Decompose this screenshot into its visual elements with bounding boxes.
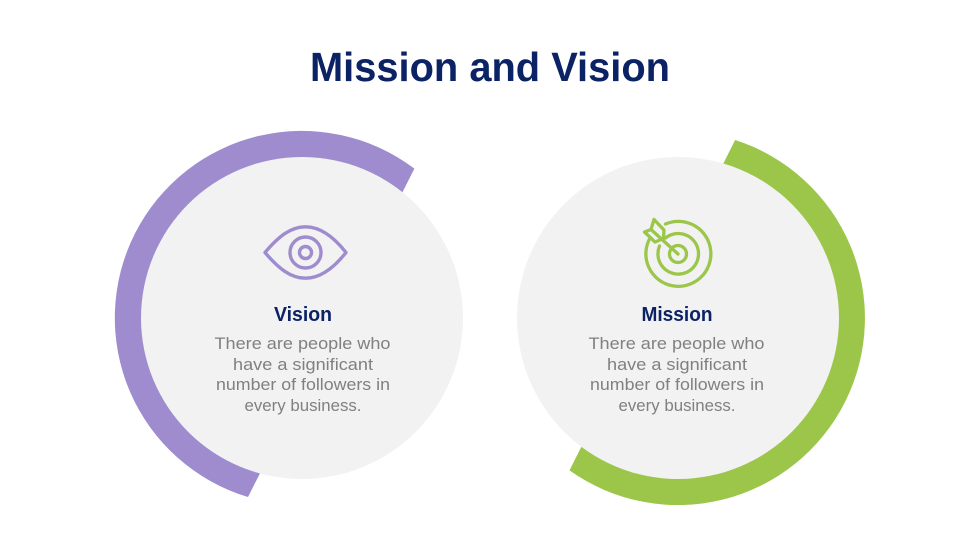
mission text: have a significant bbox=[607, 355, 747, 374]
vision heading: Vision bbox=[274, 303, 332, 326]
vision circle bbox=[141, 157, 463, 479]
mission text: number of followers in bbox=[590, 375, 764, 394]
vision ring arc bbox=[115, 131, 414, 497]
icon: eye bbox=[265, 227, 346, 278]
mission ring arc bbox=[570, 140, 865, 505]
panel: vision bbox=[115, 131, 463, 497]
panel: mission bbox=[517, 140, 865, 505]
mission text bbox=[588, 334, 764, 415]
title: Mission and Vision bbox=[310, 44, 670, 90]
vision text: every business. bbox=[244, 396, 362, 415]
vision text bbox=[214, 334, 390, 415]
vision text: There are people who bbox=[214, 334, 390, 353]
mission text: There are people who bbox=[588, 334, 764, 353]
icon: target with arrow bbox=[644, 220, 711, 286]
mission text: every business. bbox=[618, 396, 736, 415]
mission circle bbox=[517, 157, 839, 479]
vision text: have a significant bbox=[233, 355, 373, 374]
vision text: number of followers in bbox=[216, 375, 390, 394]
mission heading: Mission bbox=[642, 303, 712, 326]
